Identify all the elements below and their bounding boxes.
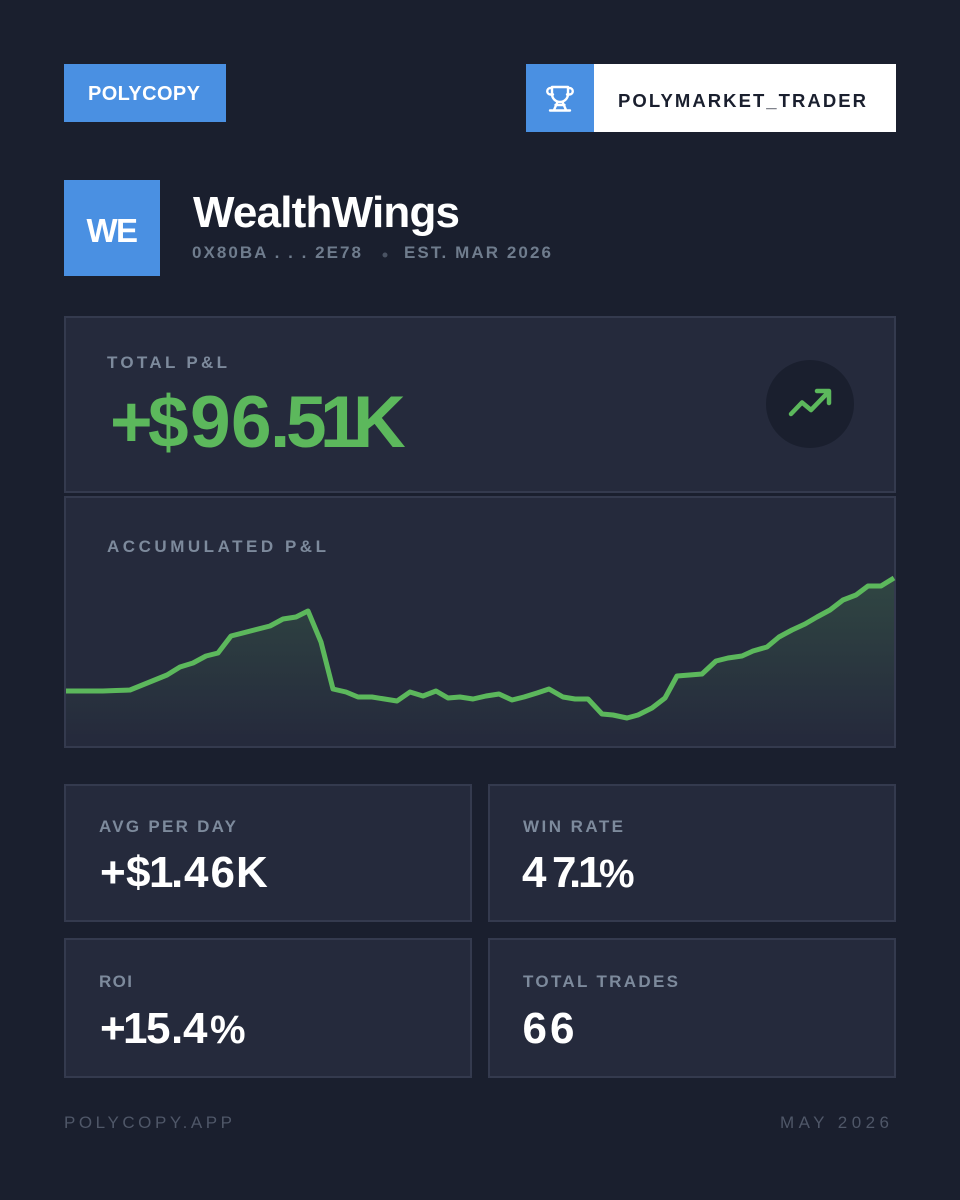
stat card: total trades: TOTAL TRADES: [523, 972, 678, 991]
area chart: [66, 578, 894, 746]
footer: site: POLYCOPY.APP: [64, 1113, 232, 1132]
stat card: avg per day: [65, 785, 471, 921]
icon: trophy: [547, 87, 573, 110]
panel: accumulated P&L chart: [65, 497, 895, 747]
stat card: win rate: 47.1: [522, 848, 602, 897]
brand badge: POLYCOPY: POLYCOPY: [88, 83, 201, 105]
panel: total P&L: [65, 317, 895, 492]
badge label: POLYMARKET_TRADER: [618, 90, 866, 111]
wallet and established date: [192, 243, 551, 262]
brand badge: POLYCOPY: [64, 64, 226, 122]
trader badge: [526, 64, 896, 132]
stat card: win rate: [489, 785, 895, 921]
avatar: WE: WE: [86, 212, 138, 249]
label: total P&L: TOTAL P&L: [107, 353, 227, 372]
stat card: ROI: [65, 939, 471, 1077]
wallet and established date: EST. MAR 2026: [404, 243, 551, 262]
label: accumulated P&L: ACCUMULATED P&L: [107, 537, 326, 556]
stat card: avg per day: +$1.46K: [100, 848, 268, 897]
stat card: avg per day: AVG PER DAY: [99, 817, 237, 836]
icon: trending up: [766, 360, 854, 448]
wallet and established date: 0X80BA . . . 2E78: [192, 243, 361, 262]
stat card: win rate: %: [599, 852, 635, 896]
value: total P&L: +$96.51K: [110, 382, 406, 463]
footer: date: MAY 2026: [780, 1113, 889, 1132]
stat card: total trades: [489, 939, 895, 1077]
stat card: ROI: ROI: [99, 972, 132, 991]
avatar: WE: [64, 180, 160, 276]
stat card: total trades: 66: [522, 1004, 574, 1053]
stat card: ROI: %: [210, 1008, 246, 1052]
stat card: win rate: WIN RATE: [523, 817, 623, 836]
stat card: ROI: +15.4: [100, 1004, 207, 1053]
trader name: WealthWings: [193, 188, 460, 237]
